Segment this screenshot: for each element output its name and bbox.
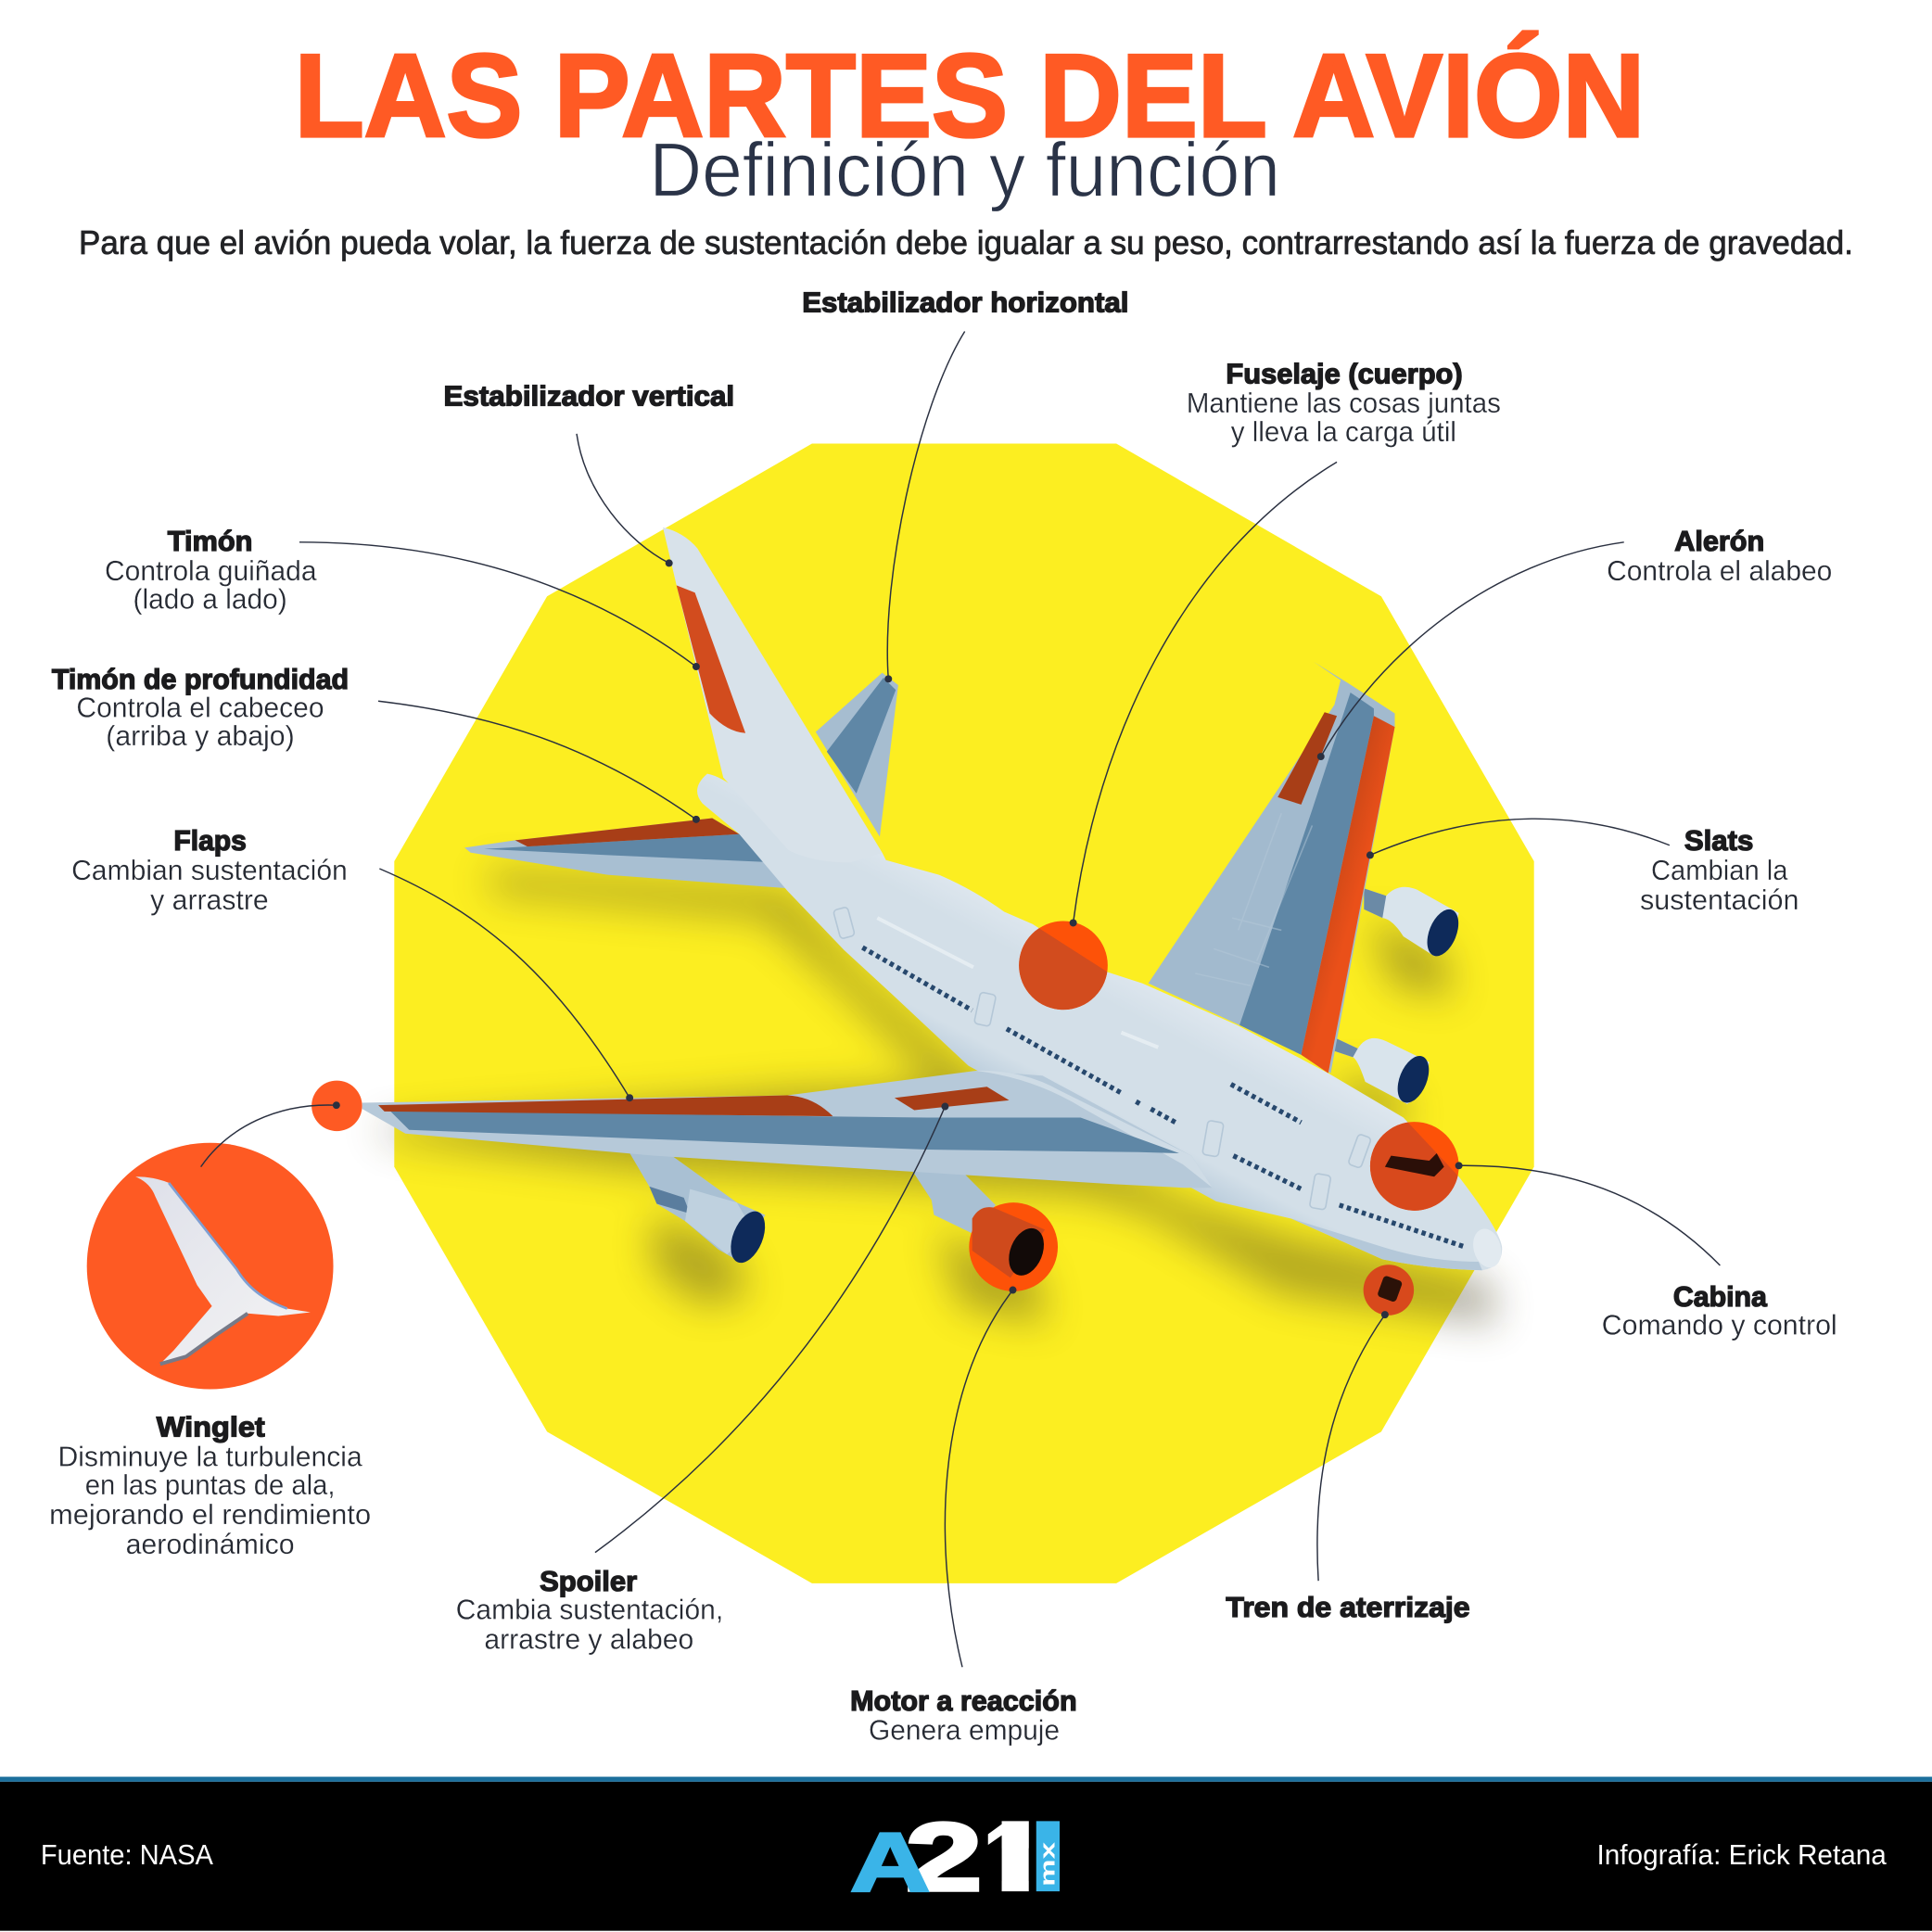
author credit: Infografía: Erick Retana: [1596, 1839, 1887, 1871]
label: Spoiler: arrastre y alabeo: [484, 1623, 693, 1655]
label: Winglet: en las puntas de ala,: [85, 1469, 336, 1501]
near horizontal stabilizer: [464, 819, 813, 896]
label: Fuselaje: Fuselaje (cuerpo): [1226, 358, 1463, 389]
label: Winglet: Disminuye la turbulencia: [57, 1442, 362, 1473]
label: Timón de profundidad: Timón de profundidad: [52, 664, 349, 695]
nose cone: [1469, 1226, 1506, 1271]
far wing: [1149, 662, 1395, 1074]
callout line: Winglet: [201, 1101, 340, 1167]
label: Alerón: Controla el alabeo: [1607, 555, 1832, 587]
logo: mx: [1036, 1841, 1060, 1887]
label: Slats: Cambian la: [1651, 855, 1788, 886]
intro text: Para que el avión pueda volar, la fuerza de sustentación debe igualar a su peso, contrarrestando así la fuerza de gravedad.: [79, 224, 1853, 261]
logo: 1: [982, 1802, 1031, 1913]
callout line: Cabina: [1455, 1162, 1720, 1265]
fuselage highlight: [877, 918, 1158, 1048]
fuselage: [697, 774, 1502, 1270]
label: Estabilizador vertical: Estabilizador vertical: [443, 380, 734, 412]
label: Timón: Timón: [168, 526, 252, 557]
slats: [1302, 716, 1395, 1074]
near engine inner pylon: [913, 1172, 996, 1233]
label: Motor a reacción: Genera empuje: [869, 1715, 1060, 1747]
label: Fuselaje: Mantiene las cosas juntas: [1187, 388, 1501, 419]
callout line: Motor: [945, 1287, 1016, 1667]
label: Flaps: [71, 825, 348, 916]
label: Timón de profundidad: Controla el cabeceo: [76, 693, 324, 724]
passenger windows: [862, 947, 1465, 1247]
label: Motor a reacción: Motor a reacción: [850, 1685, 1077, 1717]
label: Cabina: [1602, 1281, 1837, 1341]
highlight circle: landing gear: [1364, 1265, 1414, 1316]
highlight circle: fuselage: [1019, 921, 1108, 1010]
spoiler: [895, 1087, 1010, 1111]
label: Slats: [1640, 825, 1799, 916]
near wing: [362, 1071, 1213, 1188]
label: Fuselaje: [1187, 358, 1501, 448]
label: Flaps: y arrastre: [150, 884, 269, 916]
subtitle: Definición y función: [649, 127, 1280, 212]
winglet image: [135, 1176, 311, 1364]
label: Timón de profundidad: [52, 664, 349, 752]
label: Timón: [105, 526, 317, 616]
rudder: [677, 585, 745, 733]
label: Timón de profundidad: (arriba y abajo): [106, 720, 295, 752]
label: Motor a reacción: [850, 1685, 1077, 1747]
label: Alerón: [1607, 526, 1832, 587]
label: Winglet: Winglet: [157, 1412, 265, 1443]
title: LAS PARTES DEL AVIÓN: [295, 30, 1645, 162]
wing fairing: [976, 1071, 1213, 1188]
yellow dodecagon background: [394, 443, 1534, 1583]
far engine lower: [1334, 1037, 1435, 1107]
callout line: Estabilizador vertical: [577, 434, 673, 566]
callout line: Timón de profundidad: [378, 701, 700, 823]
logo: 2: [906, 1803, 982, 1911]
callout line: Alerón: [1317, 542, 1624, 760]
label: Slats: Slats: [1684, 825, 1753, 857]
highlight circle: engine: [969, 1202, 1058, 1291]
label: Winglet: aerodinámico: [126, 1529, 295, 1560]
label: Tren de aterrizaje: Tren de aterrizaje: [1226, 1592, 1470, 1623]
winglet circle: [87, 1143, 334, 1390]
label: Spoiler: [456, 1566, 723, 1655]
callout line: Flaps: [379, 869, 633, 1101]
label: Winglet: mejorando el rendimiento: [49, 1499, 371, 1531]
vertical stabilizer: [663, 527, 883, 862]
label: Slats: sustentación: [1640, 884, 1799, 916]
near engine outer: [629, 1150, 771, 1267]
label: Timón: (lado a lado): [133, 584, 287, 616]
lower nose shade: [1291, 1218, 1482, 1270]
callout line: Slats: [1366, 819, 1670, 858]
label: Flaps: Flaps: [173, 825, 247, 857]
aileron: [1277, 712, 1337, 805]
winglet detail: [87, 1143, 334, 1390]
far engine upper: [1364, 887, 1465, 960]
highlight circle: cockpit: [1370, 1122, 1459, 1211]
callout line: Fuselaje: [1070, 462, 1337, 926]
callout line: Spoiler: [595, 1103, 948, 1553]
label: Spoiler: Cambia sustentación,: [456, 1594, 723, 1625]
logo: A: [850, 1816, 930, 1910]
airplane: [311, 527, 1506, 1316]
label: Spoiler: Spoiler: [540, 1566, 637, 1597]
doors: [833, 907, 1371, 1210]
highlight circle: winglet tip: [311, 1081, 362, 1131]
callout line: Estabilizador horizontal: [884, 332, 965, 682]
logo: [850, 1802, 1060, 1913]
source credit: Fuente: NASA: [41, 1839, 214, 1871]
callout line: Timón: [299, 542, 700, 670]
label: Flaps: Cambian sustentación: [71, 855, 348, 886]
flaps: [378, 1096, 833, 1116]
callout line: Tren de aterrizaje: [1317, 1311, 1389, 1581]
label: Cabina: Cabina: [1673, 1281, 1768, 1313]
label: Alerón: Alerón: [1674, 526, 1764, 557]
label: Fuselaje: y lleva la carga útil: [1231, 416, 1456, 448]
elevator: [515, 819, 739, 846]
label: Timón: Controla guiñada: [105, 555, 317, 587]
label: Winglet: [49, 1412, 371, 1560]
plane shadow: [370, 870, 1497, 1325]
label: Estabilizador horizontal: Estabilizador horizontal: [802, 286, 1128, 318]
label: Cabina: Comando y control: [1602, 1309, 1837, 1341]
far horizontal stabilizer: [816, 673, 898, 836]
footer: [0, 1777, 1932, 1931]
